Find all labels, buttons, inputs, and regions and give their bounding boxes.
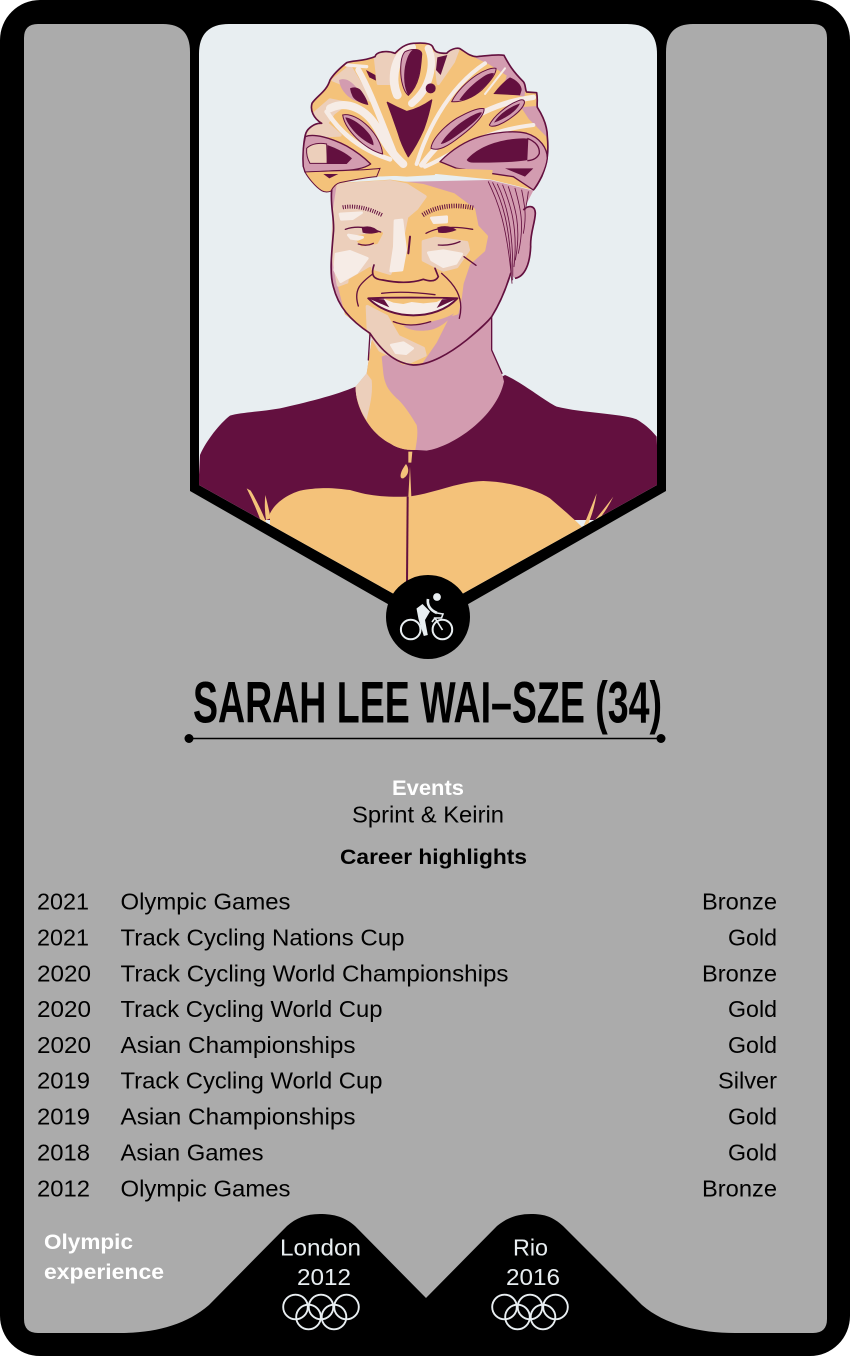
- row 2020 World Cup: Gold: [728, 996, 777, 1022]
- row 2021 Nations Cup: 2021: [37, 924, 89, 950]
- row 2012 Olympic Games: 2012: [37, 1175, 90, 1201]
- portrait illustration: [197, 24, 660, 637]
- Rio 2016: [492, 1234, 568, 1329]
- olympic experience heading: [44, 1230, 164, 1284]
- events heading: Events: [392, 776, 464, 800]
- zip: [401, 452, 412, 497]
- helmet cream strands: [327, 47, 533, 167]
- row 2020 World Cup: [37, 996, 777, 1022]
- row 2019 Asian Championships: 2019: [37, 1104, 90, 1130]
- helmet lower band: [305, 168, 380, 192]
- row 2020 Asian Championships: Asian Championships: [120, 1032, 356, 1058]
- row 2020 World Cup: Track Cycling World Cup: [120, 996, 382, 1022]
- helmet small dark vents: [366, 55, 447, 81]
- row 2020 Asian Championships: 2020: [37, 1032, 91, 1058]
- face lines: [331, 182, 528, 373]
- London 2012: London: [280, 1234, 361, 1260]
- eyes: [362, 226, 457, 234]
- row 2019 Asian Championships: Asian Championships: [120, 1104, 356, 1130]
- events list: Sprint & Keirin: [352, 802, 504, 828]
- row 2012 Olympic Games: Olympic Games: [120, 1175, 290, 1201]
- London 2012: 2012: [297, 1264, 351, 1290]
- icon: olympic rings London: [283, 1295, 359, 1329]
- icon: cyclist badge: [386, 575, 470, 659]
- career highlights table: [37, 888, 777, 1201]
- row 2021 Nations Cup: Gold: [728, 924, 777, 950]
- row 2019 World Cup: Silver: [718, 1068, 777, 1094]
- Rio 2016: 2016: [506, 1264, 560, 1290]
- face: [332, 180, 511, 324]
- row 2018 Asian Games: 2018: [37, 1140, 90, 1166]
- helmet left vents: [343, 115, 383, 154]
- helmet right vents: [452, 68, 496, 102]
- London 2012: [280, 1234, 361, 1329]
- row 2020 World Championships: Bronze: [702, 960, 777, 986]
- career highlights heading: Career highlights: [340, 845, 527, 869]
- olympic experience heading: Olympic: [44, 1230, 133, 1254]
- face highlights: [335, 213, 462, 354]
- row 2019 World Cup: Track Cycling World Cup: [120, 1068, 382, 1094]
- row 2018 Asian Games: [37, 1140, 777, 1166]
- helmet top vent: [401, 49, 422, 95]
- ear and side hair: [490, 180, 535, 278]
- helmet: [302, 42, 549, 192]
- helmet light peach patches: [305, 48, 458, 137]
- helmet outline: [303, 43, 548, 190]
- row 2021 Nations Cup: Track Cycling Nations Cup: [120, 924, 404, 950]
- row 2021 Olympic Games: Olympic Games: [120, 888, 290, 914]
- row 2019 World Cup: 2019: [37, 1068, 90, 1094]
- olympic experience heading: experience: [44, 1260, 164, 1284]
- row 2020 World Championships: [37, 960, 777, 986]
- row 2018 Asian Games: Asian Games: [120, 1140, 264, 1166]
- row 2020 World Championships: Track Cycling World Championships: [120, 960, 508, 986]
- neck: [356, 313, 504, 451]
- row 2019 Asian Championships: [37, 1104, 777, 1130]
- row 2019 World Cup: [37, 1068, 777, 1094]
- helmet lower right vent: [440, 132, 547, 190]
- row 2018 Asian Games: Gold: [728, 1140, 777, 1166]
- row 2021 Olympic Games: 2021: [37, 888, 89, 914]
- row 2021 Olympic Games: Bronze: [702, 888, 777, 914]
- jersey: [197, 375, 660, 520]
- title rule: [184, 734, 666, 743]
- row 2012 Olympic Games: [37, 1175, 777, 1201]
- jersey yellow panel: [270, 481, 582, 594]
- row 2019 Asian Championships: Gold: [728, 1104, 777, 1130]
- row 2020 World Cup: 2020: [37, 996, 91, 1022]
- row 2021 Nations Cup: [37, 924, 777, 950]
- mouth: [368, 298, 457, 315]
- Rio 2016: Rio: [513, 1234, 548, 1260]
- row 2020 Asian Championships: [37, 1032, 777, 1058]
- eye yellow shading: [348, 232, 383, 284]
- helmet shell: [306, 44, 548, 190]
- sleeve marks: [247, 488, 613, 528]
- lower lip shade: [403, 313, 454, 331]
- icon: olympic rings Rio: [492, 1295, 568, 1329]
- helmet centre vent: [387, 100, 432, 157]
- row 2021 Olympic Games: [37, 888, 777, 914]
- face light shading: [333, 182, 468, 363]
- helmet lower left vent: [303, 135, 371, 172]
- row 2020 World Championships: 2020: [37, 960, 91, 986]
- row 2012 Olympic Games: Bronze: [702, 1175, 777, 1201]
- row 2020 Asian Championships: Gold: [728, 1032, 777, 1058]
- face yellow shading: [338, 182, 486, 363]
- helmet pink patches: [477, 55, 548, 137]
